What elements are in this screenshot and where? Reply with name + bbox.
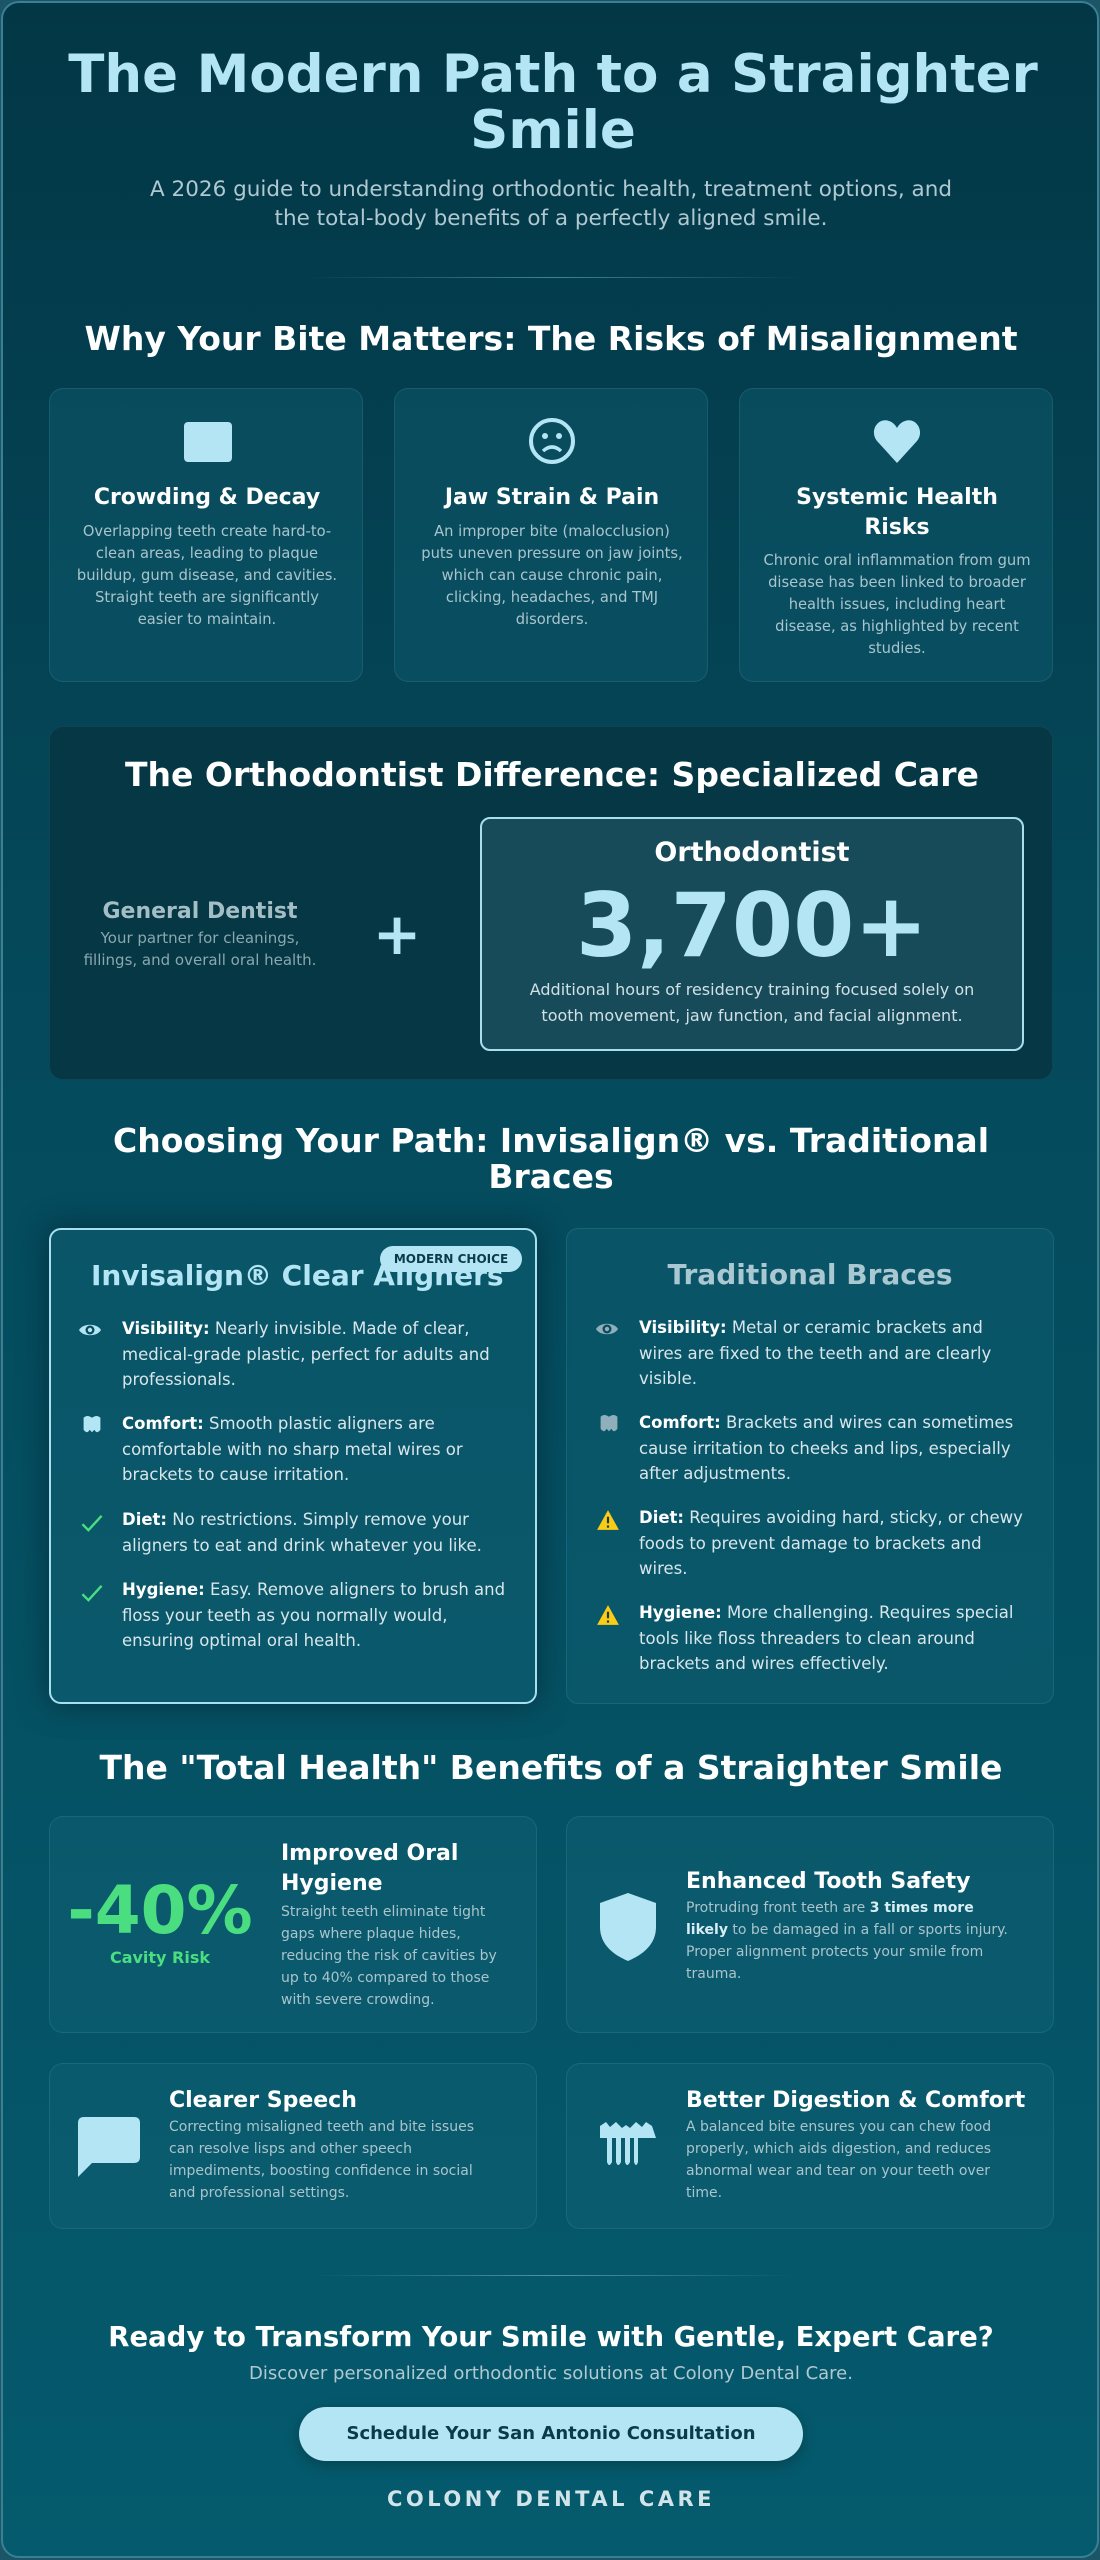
panel: tooth safety [566,1816,1054,2033]
item: hygiene: Hygiene: Easy. Remove aligners to brush and floss your teeth as you normally would, ensuring optimal oral health. [122,1580,505,1650]
text [281,1841,497,2008]
title: The Modern Path to a Straighter Smile [68,44,1038,161]
footer brand: COLONY DENTAL CARE [387,2487,715,2511]
heading: choosing your path: Choosing Your Path: Invisalign® vs. Traditional Braces [113,1121,989,1196]
CTA button: Schedule Your San Antonio Consultation [346,2423,756,2444]
text: Protruding front teeth are 3 times more likely to be damaged in a fall or sports injury. Proper alignment protects your smile from trauma. [686,1900,1008,1982]
item: diet: Diet: Requires avoiding hard, sticky, or chewy foods to prevent damage to brackets and wires. [639,1508,1023,1578]
card title: Systemic Health Risks [796,485,998,540]
CTA heading: Ready to Transform Your Smile with Gentle, Expert Care? [108,2321,994,2353]
item: visibility: Visibility: Nearly invisible. Made of clear, medical-grade plastic, perfect for adults and professionals. [122,1319,490,1389]
badge [380,1246,522,1272]
icon: sad face [529,418,575,464]
text: Better Digestion & Comfort [686,2088,1025,2113]
general dentist: General Dentist [102,899,297,924]
heading: The Orthodontist Difference: Specialized Care [125,755,979,794]
icon: speech bubble [78,2117,140,2177]
general dentist [84,899,316,969]
card title: Invisalign® Clear Aligners [91,1259,504,1292]
item: comfort: Comfort: Brackets and wires can sometimes cause irritation to cheeks and lips, especially after adjustments. [639,1413,1013,1483]
badge: MODERN CHOICE [394,1252,508,1266]
CTA subtext: Discover personalized orthodontic solutions at Colony Dental Care. [249,2363,853,2384]
panel: clearer speech [49,2063,537,2229]
icon: square tooth [184,422,232,462]
icon: heart [874,420,920,463]
orthodontist box: Orthodontist [654,837,850,868]
panel: crowding & decay [49,388,363,682]
general dentist: Your partner for cleanings, fillings, and overall oral health. [84,929,316,969]
big stat: 3,700+ [576,874,928,977]
text: Correcting misaligned teeth and bite issues can resolve lisps and other speech impediments, boosting confidence in social and professional settings. [169,2119,474,2201]
card title: Jaw Strain & Pain [445,485,659,510]
stat: -40%: Cavity Risk [110,1948,210,1967]
heading: why your bite matters: Why Your Bite Matters: The Risks of Misalignment [84,319,1018,358]
panel: jaw strain [394,388,708,682]
item: hygiene: Hygiene: More challenging. Requires special tools like floss threaders to clean around brackets and wires effectively. [639,1603,1013,1673]
panel: oral hygiene benefit [49,1816,537,2033]
text [686,2088,1025,2201]
panel: invisalign [49,1228,537,1704]
text: Clearer Speech [169,2088,357,2113]
card text: Chronic oral inflammation from gum disease has been linked to broader health issues, including heart disease, as highlighted by recent studies. [763,552,1031,657]
icon: shield [600,1893,656,1961]
card text: An improper bite (malocclusion) puts uneven pressure on jaw joints, which can cause chronic pain, clicking, headaches, and TMJ disorders. [421,523,683,628]
card title: Traditional Braces [667,1258,953,1291]
panel: orthodontist difference [49,726,1053,1080]
text: Straight teeth eliminate tight gaps where plaque hides, reducing the risk of cavities by up to 40% compared to those with severe crowding. [281,1904,497,2008]
panel: digestion [566,2063,1054,2229]
item: visibility: Visibility: Metal or ceramic brackets and wires are fixed to the teeth and are clearly visible. [639,1318,991,1388]
plus sign: + [373,900,421,968]
panel: systemic health [739,388,1053,682]
card text: Overlapping teeth create hard-to-clean areas, leading to plaque buildup, gum disease, and cavities. Straight teeth are significantly easier to maintain. [77,523,337,628]
item: diet: Diet: No restrictions. Simply remove your aligners to eat and drink whatever you like. [122,1510,482,1555]
item: comfort: Comfort: Smooth plastic aligners are comfortable with no sharp metal wires or brackets to cause irritation. [122,1414,463,1484]
panel: traditional braces [566,1228,1054,1704]
text: A balanced bite ensures you can chew food properly, which aids digestion, and reduces abnormal wear and tear on your teeth over time. [686,2119,991,2201]
subtitle: A 2026 guide to understanding orthodontic health, treatment options, and the total-body benefits of a perfectly aligned smile. [150,177,952,231]
orthodontist box [480,817,1024,1051]
heading: total health: The "Total Health" Benefits of a Straighter Smile [100,1748,1002,1787]
icon: teeth [600,2122,656,2165]
text: Improved Oral Hygiene [281,1841,458,1896]
orthodontist box: Additional hours of residency training focused solely on tooth movement, jaw function, and facial alignment. [530,980,974,1025]
card title: Crowding & Decay [94,485,320,510]
text: Enhanced Tooth Safety [686,1869,970,1894]
stat: -40%: -40% [67,1872,253,1949]
CTA button [299,2407,803,2461]
